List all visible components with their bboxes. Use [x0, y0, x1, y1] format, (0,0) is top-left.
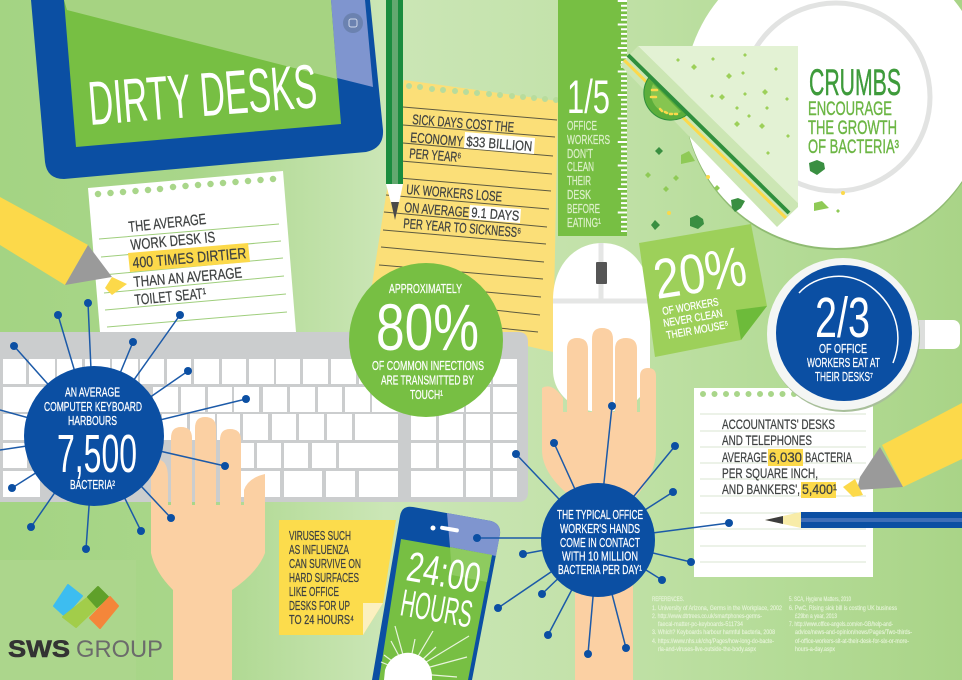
cup caption: THEIR DESKS⁷ [815, 369, 873, 384]
note text: 400 TIMES DIRTIER [132, 245, 247, 272]
note text: 6,030 [769, 449, 802, 465]
notepad text: UK workers: 9.1 DAYS [471, 204, 520, 224]
SWS Group logo: SWS [8, 636, 70, 663]
blue circle: keyboard bacteria: 7,500 [57, 424, 137, 484]
crumbs heading: ENCOURAGE [808, 99, 892, 120]
note text: 5,400¹ [802, 481, 837, 497]
notepad text: sick days [409, 111, 535, 165]
crumbs heading: THE GROWTH [808, 118, 897, 139]
24:00 hours text [397, 543, 484, 636]
ruler caption: CLEAN [567, 159, 594, 174]
green circle: 80%: APPROXIMATELY [389, 281, 462, 296]
tomato slice [644, 76, 688, 120]
sticky note text: VIRUSES SUCH [289, 528, 351, 543]
card caption: OF WORKERS [661, 296, 720, 318]
green circle: 80%: ARE TRANSMITTED BY [381, 372, 474, 388]
note text [722, 416, 852, 497]
card caption: NEVER CLEAN [662, 308, 724, 330]
coffee cup [767, 258, 960, 412]
ruler caption: OFFICE [567, 118, 597, 133]
references: £29bn a year, 2013 [795, 613, 837, 620]
notepad text: sick days: $33 BILLION [466, 133, 533, 154]
note text: AND TELEPHONES [722, 432, 812, 448]
cup caption: WORKERS EAT AT [807, 355, 880, 370]
references: faecal-matter-pc-keyboards-511734 [658, 621, 743, 628]
note text: AVERAGE [722, 449, 767, 465]
sticky note text [289, 528, 361, 627]
ruler caption [567, 118, 610, 230]
note text: THE AVERAGE [128, 211, 207, 236]
yellow sticky note [279, 520, 396, 635]
24:00 hours text: HOURS [397, 583, 476, 636]
ruler caption: BEFORE [567, 201, 600, 216]
blue circle: keyboard bacteria: BACTERIA² [70, 477, 115, 492]
crumbs heading: OF BACTERIA³ [808, 137, 899, 158]
green pencil [386, 0, 403, 220]
notepad text: sick days: ECONOMY [410, 129, 464, 149]
blue pencil [765, 512, 962, 528]
green circle: 80%: TOUCH¹ [410, 387, 443, 402]
green circle: 80%: 80% [376, 290, 479, 364]
note text: BACTERIA [805, 449, 852, 465]
note text [128, 211, 247, 309]
sticky note text: AS INFLUENZA [289, 542, 349, 557]
blue circle: keyboard bacteria [24, 366, 164, 506]
logo patch [0, 560, 136, 680]
references: advice/news-and-opinion/news/Pages/Two-thirds- [795, 629, 912, 636]
notepad text: UK workers: ON AVERAGE [404, 199, 470, 220]
left highlighter [0, 197, 127, 295]
references: 1. University of Arizona, Germs in the Workplace, 2002 [652, 605, 782, 612]
crumbs [645, 147, 845, 230]
white note: accountants [694, 388, 873, 577]
references: ria-and-viruses-live-outside-the-body.aspx [658, 646, 757, 653]
blue circle: hands bacteria: BACTERIA PER DAY¹ [558, 562, 642, 577]
plate [684, 0, 962, 250]
sandwich [620, 46, 798, 227]
references: 2. http://www.dtrtrees.co.uk/smartphones-germs- [652, 613, 762, 620]
keyboard [0, 332, 528, 502]
sticky note text: DESKS FOR UP [289, 598, 350, 613]
references: of-office-workers-sit-at-their-desk-for-six-or-more- [795, 638, 909, 645]
note text: ACCOUNTANTS' DESKS [722, 416, 835, 432]
phone [372, 507, 500, 680]
SWS Group logo: GROUP [76, 636, 163, 663]
tablet home button [343, 13, 363, 33]
notepad text: UK workers [403, 181, 522, 240]
crumbs heading [808, 62, 901, 158]
tablet [31, 0, 383, 179]
24:00 hours text: 24:00 [403, 543, 484, 602]
note text: AND BANKERS', [722, 481, 800, 497]
right hand [542, 328, 656, 680]
green circle: 80% [349, 263, 503, 417]
note text: THAN AN AVERAGE [133, 265, 243, 291]
sun icon [381, 626, 469, 680]
blue circle: hands bacteria: WORKER'S HANDS [560, 521, 640, 536]
sticky note text: TO 24 HOURS⁴ [289, 612, 354, 627]
notepad text: UK workers: UK WORKERS LOSE [406, 181, 503, 205]
references: 4. https://www.nhs.uk/chq/Pages/how-long-do-bacte- [652, 638, 774, 645]
ruler caption: DESK [567, 187, 591, 202]
cup caption [807, 341, 880, 384]
card caption: THEIR MOUSE⁵ [665, 319, 730, 342]
hand spokes [473, 402, 733, 658]
sticky note text: HARD SURFACES [289, 570, 359, 585]
blue circle: keyboard bacteria: HARBOURS [68, 413, 117, 428]
green circle: 80%: OF COMMON INFECTIONS [372, 358, 484, 373]
ruler caption: THEIR [567, 173, 591, 188]
SWS Group logo [8, 585, 163, 663]
1/5 number: 1/5 [567, 70, 610, 123]
title: DIRTY DESKS [86, 52, 319, 139]
mouse [553, 243, 650, 412]
notepad text: UK workers: PER YEAR TO SICKNESS⁶ [403, 215, 522, 240]
note text: WORK DESK IS [130, 229, 216, 254]
notepad text: sick days: PER YEAR⁶ [409, 145, 462, 165]
references: hours-a-day.aspx [795, 646, 836, 653]
note text: PER SQUARE INCH, [722, 465, 818, 481]
sticky note text: CAN SURVIVE ON [289, 556, 361, 571]
note text: TOILET SEAT¹ [134, 285, 207, 309]
card: 20% never clean mouse [639, 224, 767, 357]
references: 3. Which? Keyboards harbour harmful bacteria, 2008 [652, 629, 775, 636]
blue circle: keyboard bacteria: AN AVERAGE [65, 384, 120, 400]
right highlighter [843, 403, 962, 497]
left hand [151, 417, 265, 680]
blue circle: hands bacteria [541, 483, 655, 597]
ruler caption: EATING¹ [567, 215, 601, 230]
yellow notepad [372, 80, 558, 352]
2/3 number: 2/3 [815, 286, 870, 350]
references: 7. http://www.office-angels.com/en-GB/help-and- [789, 621, 893, 628]
ruler panel [558, 0, 627, 236]
keyboard spokes [0, 299, 250, 553]
references: REFERENCES. [652, 596, 684, 603]
notepad text: sick days: SICK DAYS COST THE [412, 111, 515, 135]
ruler caption: DON'T [567, 146, 593, 161]
white note: 400 times dirtier [88, 171, 296, 332]
card: 20% never clean mouse: 20% [649, 234, 751, 311]
references [652, 596, 912, 653]
references: 6. PwC, Rising sick bill is costing UK business [789, 605, 898, 612]
ruler caption: WORKERS [567, 132, 610, 147]
blue circle: hands bacteria: COME IN CONTACT [560, 535, 640, 550]
blue circle: hands bacteria: THE TYPICAL OFFICE [557, 507, 643, 522]
cup caption: OF OFFICE [819, 341, 867, 356]
references: 5. SCA, Hygiene Matters, 2010 [789, 596, 851, 603]
blue circle: keyboard bacteria: COMPUTER KEYBOARD [44, 399, 142, 414]
sticky note text: LIKE OFFICE [289, 584, 339, 599]
blue circle: hands bacteria: WITH 10 MILLION [562, 548, 638, 564]
card caption [661, 296, 730, 342]
